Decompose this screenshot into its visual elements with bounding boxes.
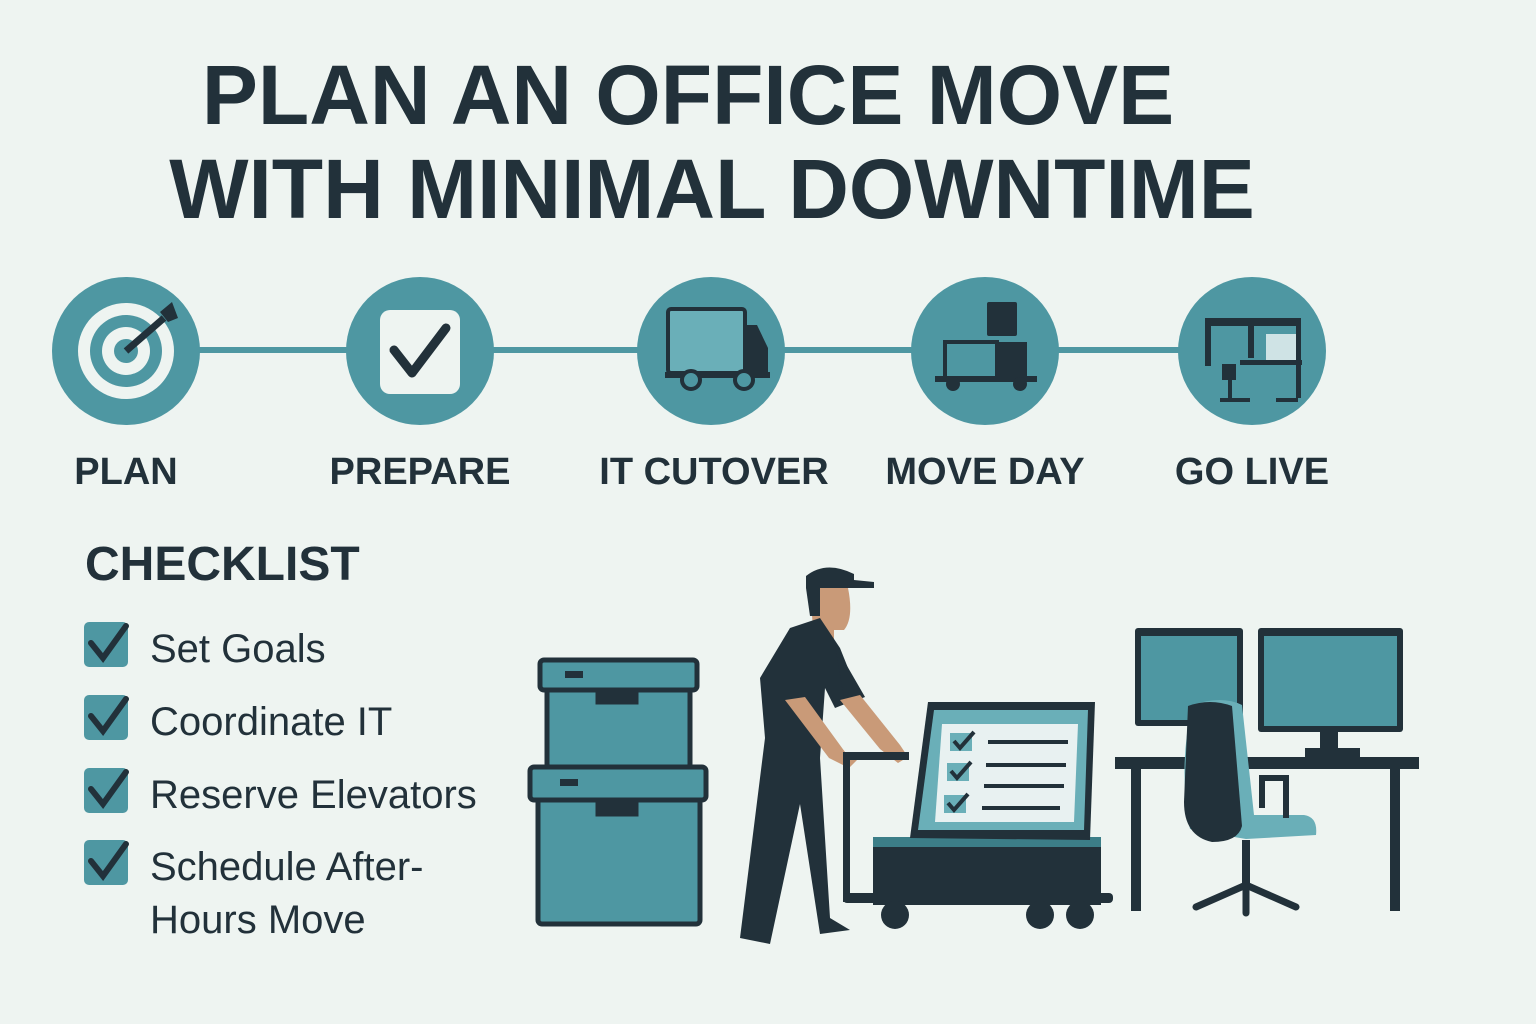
checklist: CHECKLIST [85,538,360,591]
step: it cutover: IT CUTOVER [599,451,829,493]
step: go live [1175,277,1329,493]
item: reserve elevators: Reserve Elevators [150,773,477,817]
item: coordinate it: Coordinate IT [150,700,392,744]
timeline [52,277,1329,493]
item: schedule after-hours move [84,840,424,942]
item: schedule after-hours move: Hours Move [150,898,366,942]
illustration: desk with monitors and chair [1115,628,1419,913]
step: plan [52,277,200,493]
title [169,48,1255,236]
step: it cutover [599,277,829,493]
checklist [84,538,477,942]
step: prepare: PREPARE [330,451,510,493]
item: set goals [84,622,326,671]
illustration: cart with laptop [843,702,1113,929]
step: go live: GO LIVE [1175,451,1329,493]
step: prepare [330,277,510,493]
step: move day: MOVE DAY [885,451,1085,493]
title: PLAN AN OFFICE MOVE [202,48,1174,142]
item: schedule after-hours move: Schedule After- [150,845,424,889]
title: WITH MINIMAL DOWNTIME [169,142,1255,236]
step: plan: PLAN [74,451,178,493]
illustration: worker [740,567,908,944]
step: move day [885,277,1085,493]
item: set goals: Set Goals [150,627,326,671]
illustration: boxes [530,660,706,924]
